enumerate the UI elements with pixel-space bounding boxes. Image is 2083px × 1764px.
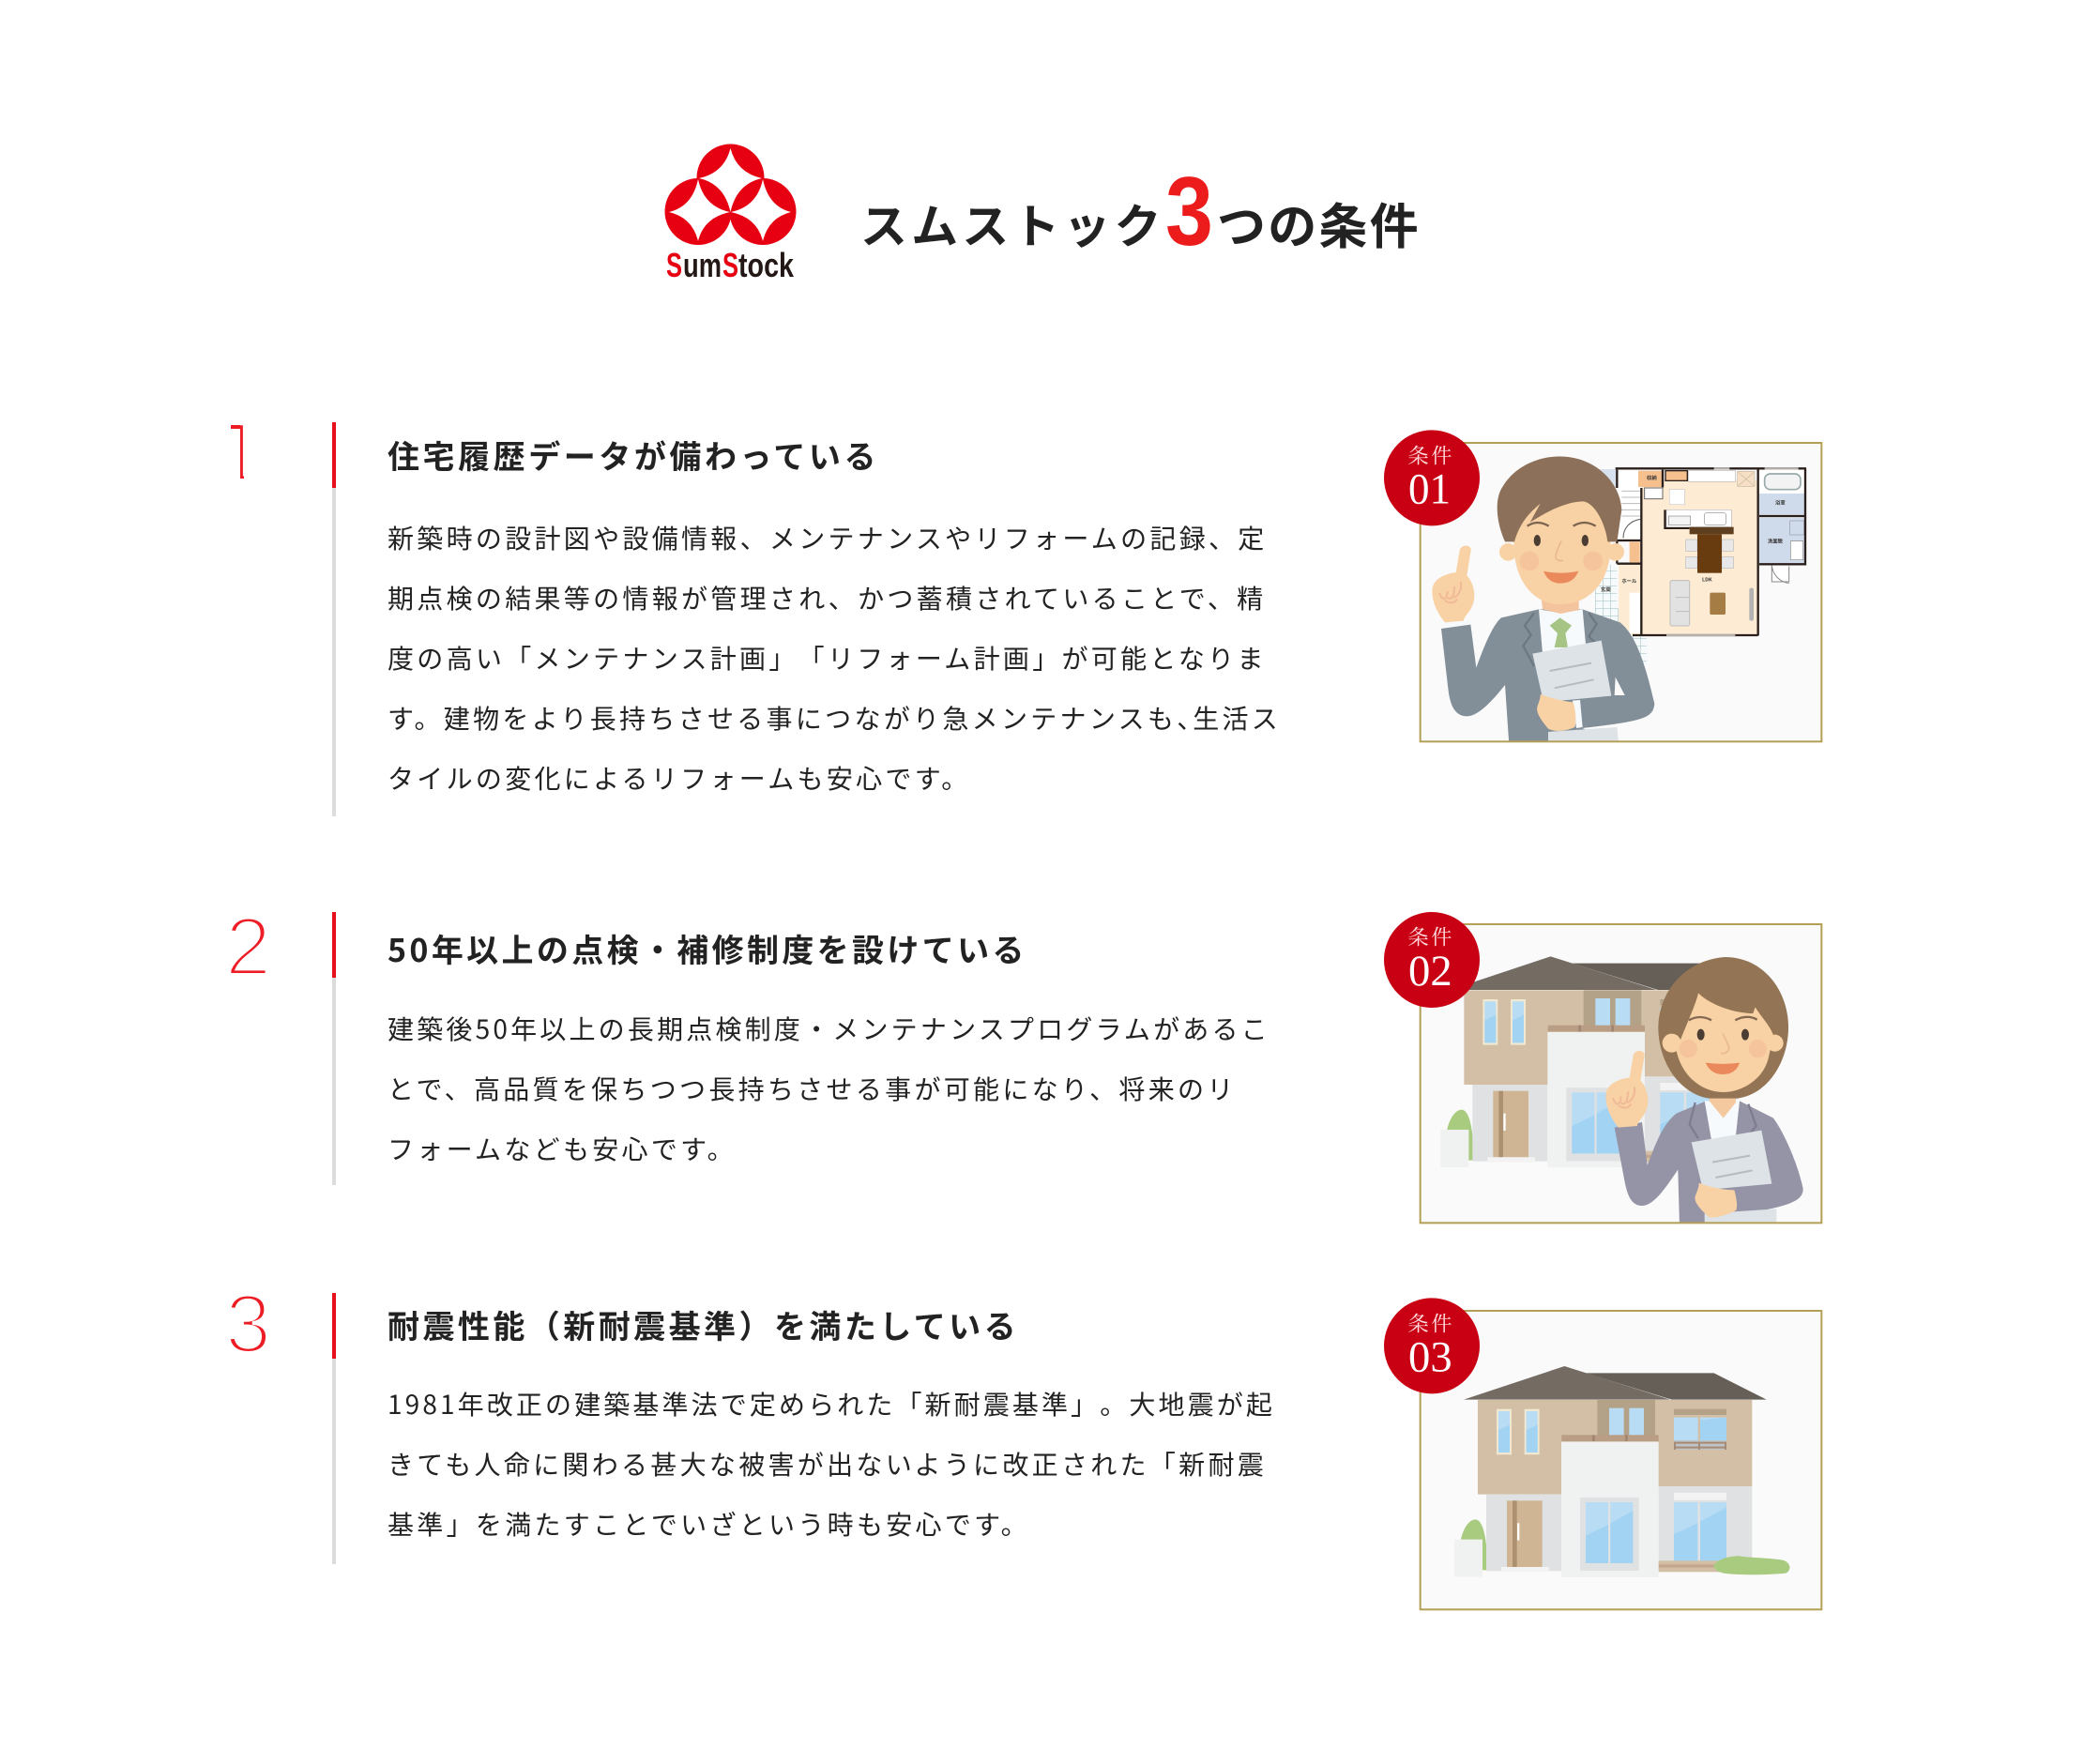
illustration panel 2: woman with house xyxy=(1384,912,1822,1224)
logo mark: three rings with star cut-outs xyxy=(664,144,796,245)
woman character xyxy=(1605,957,1803,1226)
section 1 number xyxy=(231,425,244,479)
house xyxy=(1440,956,1753,1167)
illustration panel 1: man with floor plan xyxy=(1384,430,1822,743)
floor plan: 収納 xyxy=(1647,474,1657,481)
floor plan: 浴室 xyxy=(1775,498,1786,506)
illustration panel 3: house xyxy=(1384,1298,1822,1610)
logo: SumStock xyxy=(664,144,796,284)
section 1 body: 新築時の設計図や設備情報、メンテナンスやリフォームの記録、定 xyxy=(388,519,1268,556)
badge: 条件 02: 条件 xyxy=(1408,922,1454,951)
logo wordmark: tock xyxy=(738,246,795,284)
floor plan: 玄関 xyxy=(1601,585,1611,593)
image frame xyxy=(1421,924,1821,1223)
section 1 body: 度の高い「メンテナンス計画」「リフォーム計画」が可能となりま xyxy=(388,639,1267,677)
section 3 number: 3 xyxy=(225,1277,271,1370)
man character xyxy=(1432,456,1654,744)
section 3 body: 基準」を満たすことでいざという時も安心です。 xyxy=(388,1505,1030,1543)
badge: 条件 01 xyxy=(1384,430,1480,525)
badge: 条件 03: 03 xyxy=(1408,1333,1452,1382)
title: red numeral 3: 3 xyxy=(1165,158,1213,266)
badge: 条件 02: 02 xyxy=(1408,947,1452,996)
section 2 heading: 50年以上の点検・補修制度を設けている xyxy=(388,925,1027,971)
floor plan: LDK xyxy=(1702,575,1712,583)
floor plan: ホール xyxy=(1621,577,1637,585)
section 1 number: 1 xyxy=(217,405,263,498)
logo wordmark: S xyxy=(722,246,738,284)
section 1 body: タイルの変化によるリフォームも安心です。 xyxy=(388,759,971,797)
image frame xyxy=(1421,443,1821,741)
section 3 heading: 耐震性能（新耐震基準）を満たしている xyxy=(388,1301,1019,1347)
section 2 rule xyxy=(332,912,336,1185)
section 2 body: 建築後50年以上の長期点検制度・メンテナンスプログラムがあるこ xyxy=(388,1010,1270,1047)
title: first part: スムストック xyxy=(860,190,1165,257)
section 2 number: 2 xyxy=(225,900,271,993)
section 1 body: す。建物をより長持ちさせる事につながり急メンテナンスも、生活ス xyxy=(388,699,1281,737)
section 1 body xyxy=(388,519,1281,797)
floor plan xyxy=(1595,468,1806,666)
section 3 body: きても人命に関わる甚大な被害が出ないように改正された「新耐震 xyxy=(388,1445,1267,1483)
section 1 heading: 住宅履歴データが備わっている xyxy=(388,432,879,478)
section 1 rule xyxy=(332,422,336,816)
logo wordmark: S xyxy=(666,246,682,284)
badge: 条件 03: 条件 xyxy=(1408,1308,1454,1337)
image frame xyxy=(1421,1311,1821,1609)
section 2 body xyxy=(388,1010,1270,1167)
logo wordmark: um xyxy=(683,246,722,284)
title: second part: つの条件 xyxy=(1217,188,1421,258)
section 1 body: 期点検の結果等の情報が管理され、かつ蓄積されていることで、精 xyxy=(388,579,1266,616)
badge: 条件 01: 01 xyxy=(1408,464,1451,513)
floor plan: 洗面脱 xyxy=(1768,537,1784,544)
logo wordmark xyxy=(666,246,795,284)
section 3 rule xyxy=(332,1293,336,1564)
badge: 条件 02 xyxy=(1384,912,1480,1008)
section 2 body: とで、高品質を保ちつつ長持ちさせる事が可能になり、将来のリ xyxy=(388,1070,1237,1107)
title xyxy=(860,158,1421,266)
badge: 条件 03 xyxy=(1384,1298,1480,1393)
badge: 条件 01: 条件 xyxy=(1408,440,1454,469)
section 3 body: 1981年改正の建築基準法で定められた「新耐震基準」。大地震が起 xyxy=(388,1385,1275,1422)
house xyxy=(1454,1366,1789,1577)
section 3 body xyxy=(388,1385,1275,1543)
section 2 body: フォームなども安心です。 xyxy=(388,1130,737,1167)
